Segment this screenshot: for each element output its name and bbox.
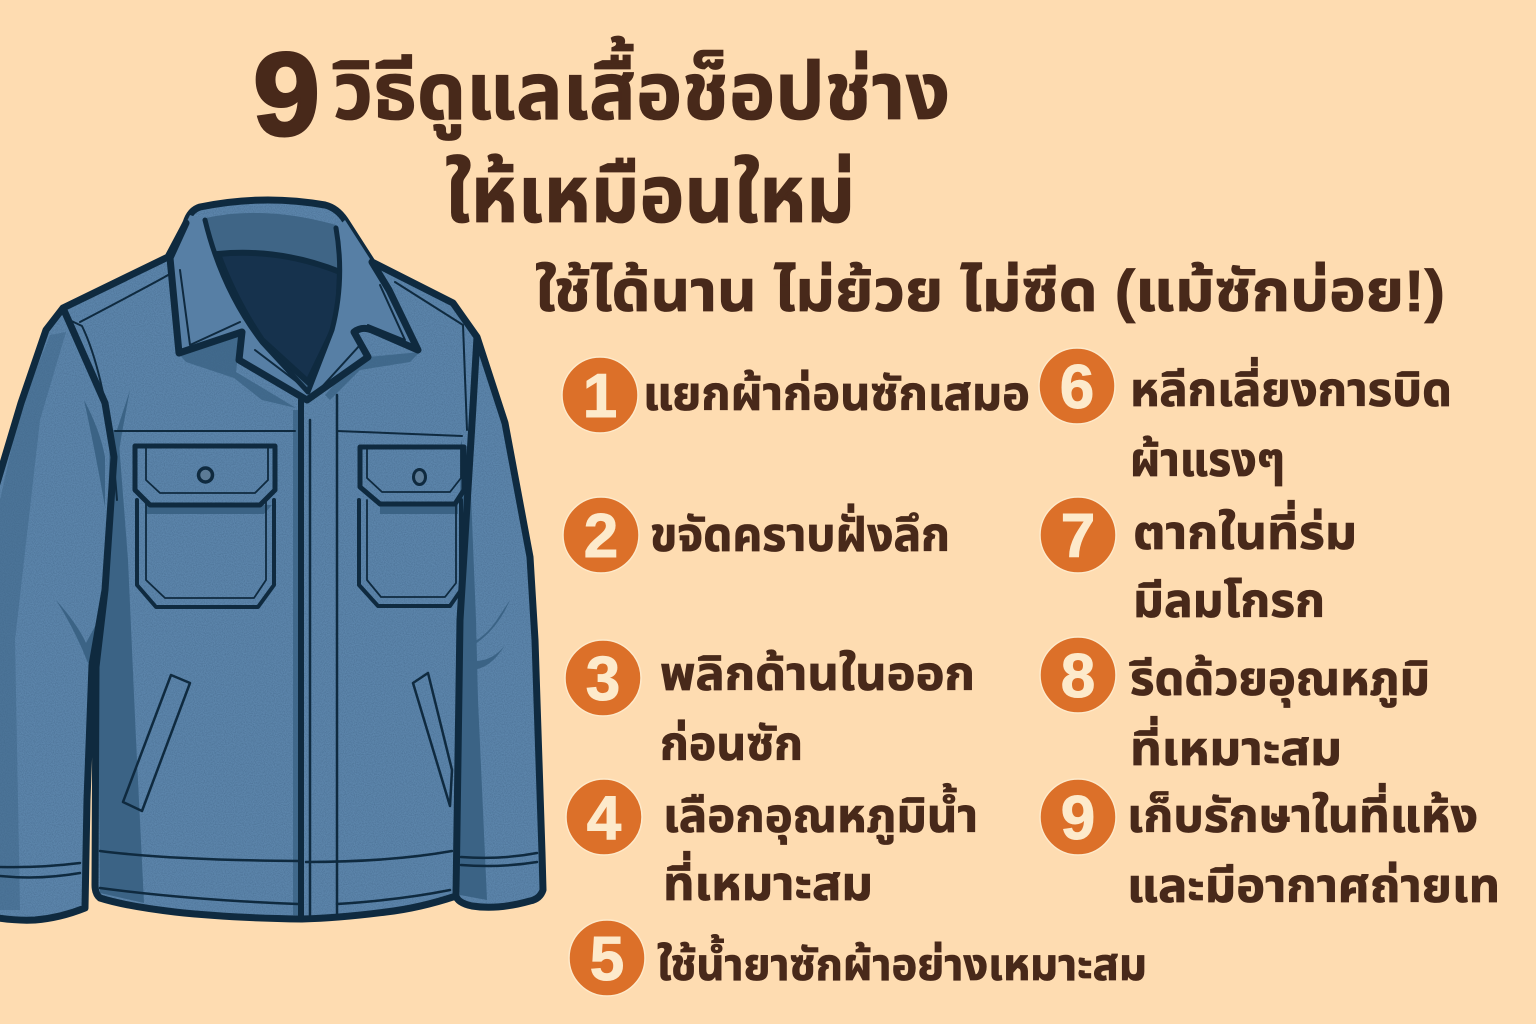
item 7: 7 — [1061, 502, 1095, 571]
item 8: 8 — [1061, 642, 1095, 711]
jacket left chest pocket — [135, 446, 275, 607]
title line 1: วิธีดูแลเสื้อช็อปช่าง — [333, 36, 950, 140]
jacket left sleeve — [0, 308, 114, 920]
illustration: blue work jacket — [0, 200, 543, 920]
title line 2: ให้เหมือนใหม่ — [445, 150, 855, 239]
item 1: แยกผ้าก่อนซักเสมอ — [643, 367, 1030, 420]
jacket placket — [301, 395, 337, 918]
item 8: ที่เหมาะสม — [1130, 716, 1342, 775]
item 3 — [565, 640, 975, 770]
jacket right chest pocket — [359, 447, 464, 606]
item 6: หลีกเลี่ยงการบิด — [1130, 357, 1452, 416]
item 8: รีดด้วยอุณหภูมิ — [1129, 652, 1430, 707]
item 4 — [566, 779, 978, 910]
jacket yoke seams — [65, 275, 467, 500]
jacket outline — [0, 200, 543, 920]
item 7 — [1040, 497, 1357, 627]
item 3: พลิกด้านในออก — [660, 647, 975, 700]
item 9 — [1040, 779, 1500, 912]
item 8 — [1040, 637, 1430, 775]
item 1: 1 — [583, 362, 617, 431]
item 6 — [1039, 348, 1452, 486]
item 9: เก็บรักษาในที่แห้ง — [1127, 783, 1478, 842]
title number 9: 9 — [253, 29, 320, 161]
item 6: 6 — [1060, 353, 1094, 422]
item 2: 2 — [584, 502, 618, 571]
jacket body and right sleeve — [63, 200, 543, 919]
item 9: 9 — [1061, 784, 1095, 853]
item 1 — [562, 357, 1030, 433]
jacket hem and cuffs — [0, 851, 537, 904]
jacket collar — [169, 215, 418, 400]
item 5 — [569, 920, 1147, 996]
jacket shading — [0, 332, 510, 915]
item 3: 3 — [586, 645, 620, 714]
item 5: ใช้น้ำยาซักผ้าอย่างเหมาะสม — [657, 934, 1147, 990]
jacket slanted side pockets — [123, 673, 452, 811]
item 2: ขจัดคราบฝั่งลึก — [650, 504, 950, 561]
item 3: ก่อนซัก — [660, 717, 803, 770]
item 9: และมีอากาศถ่ายเท — [1127, 859, 1500, 912]
item 4: ที่เหมาะสม — [663, 851, 873, 910]
subtitle: ใช้ได้นาน ไม่ย้วย ไม่ซีด (แม้ซักบ่อย!) — [535, 259, 1445, 324]
item 4: 4 — [587, 784, 622, 853]
item 4: เลือกอุณหภูมิน้ำ — [663, 783, 978, 844]
item 5: 5 — [590, 925, 624, 994]
item 6: ผ้าแรงๆ — [1130, 433, 1285, 486]
item 7: ตากในที่ร่ม — [1133, 500, 1357, 559]
jacket inside neck — [206, 213, 341, 395]
item 2 — [563, 497, 950, 573]
item 7: มีลมโกรก — [1133, 574, 1325, 627]
